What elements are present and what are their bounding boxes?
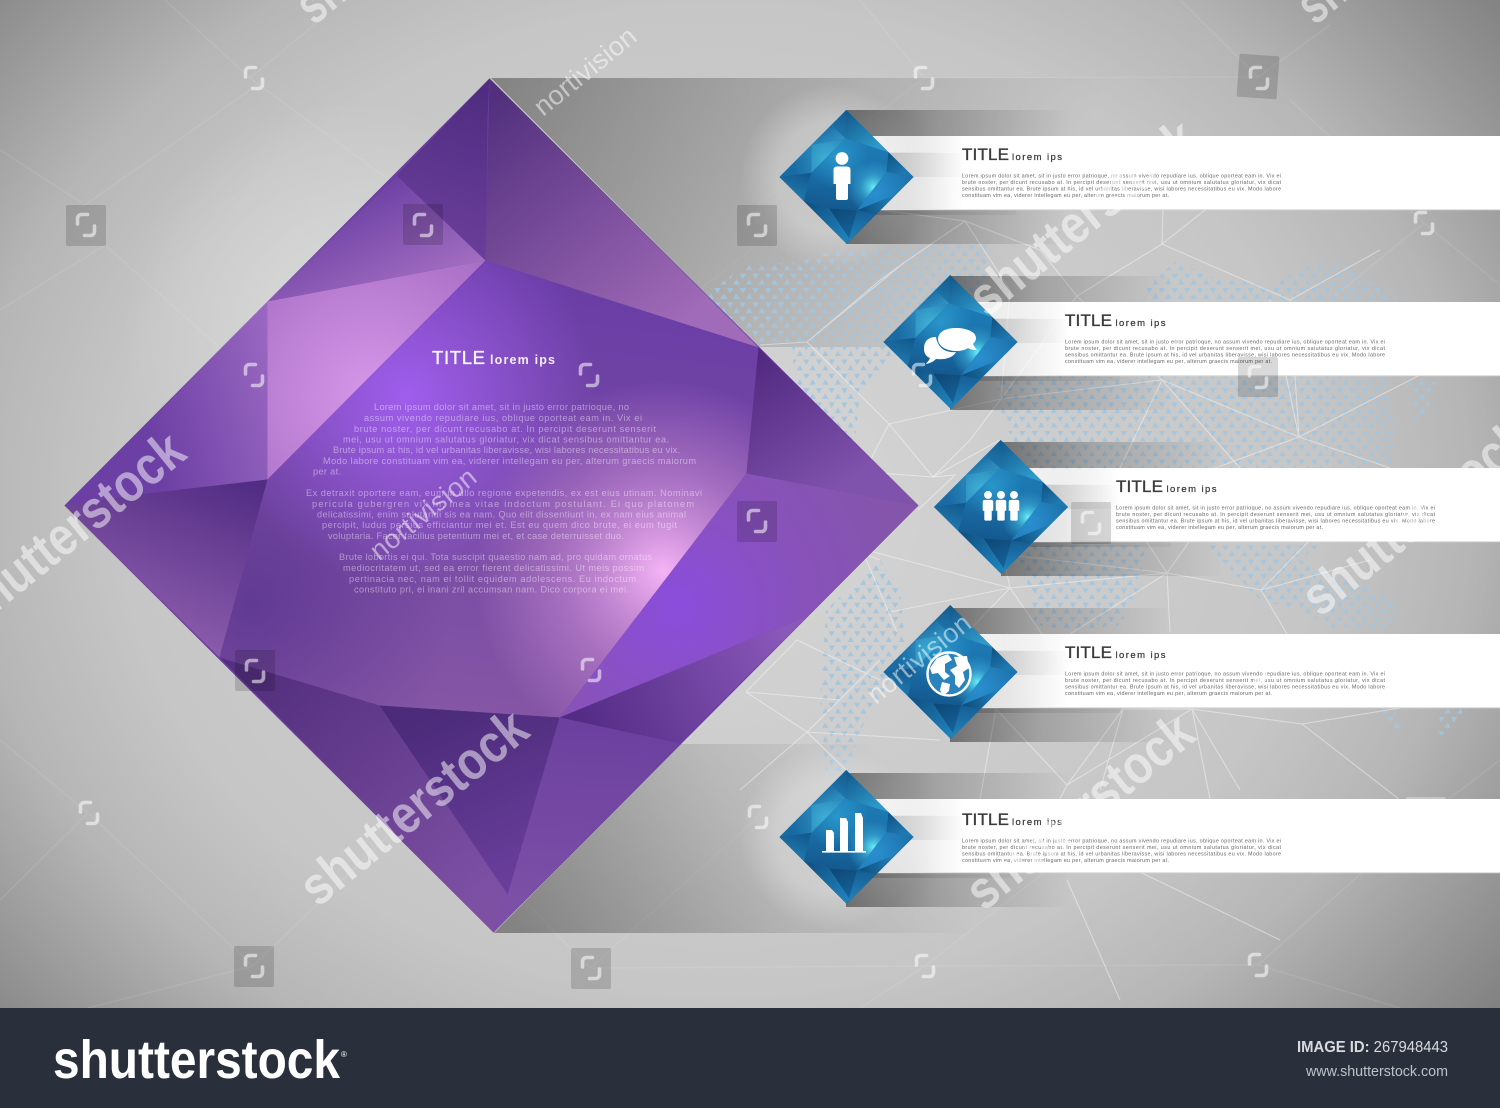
back panel: grey shadow bands behind the large diamond bbox=[491, 78, 1200, 933]
stamp marks bbox=[66, 54, 1446, 989]
icon: blue gem with bar chart bbox=[779, 770, 914, 904]
watermark text: nortivision bbox=[528, 21, 642, 122]
row 4 heading: lorem ips bbox=[1116, 650, 1166, 661]
footer logo: shutterstock bbox=[53, 1030, 341, 1090]
row 2 text: brute noster, per dicunt recusabo at. In percipit deserunt senserit mei, usu ut omnium salutatus gloriatur, vix dicat bbox=[1065, 346, 1386, 352]
icon: blue gem with globe bbox=[883, 605, 1018, 739]
text block: main body copy: per at. bbox=[313, 466, 341, 476]
row 3 text: Lorem ipsum dolor sit amet, sit in justo error patrioque, no assum vivendo repudiare ius, oblique oporteat eam in. Vix ei bbox=[1116, 506, 1435, 512]
row 4 heading bbox=[1065, 643, 1166, 662]
row 4 text bbox=[1065, 672, 1386, 697]
text block: main body copy: mei, usu ut omnium salutatus gloriatur, vix dicat sensibus omittantur ea. bbox=[343, 434, 669, 444]
text block: main body copy: delicatissimi, enim salutandi sis ea nam. Quo elit dissentiunt in, ex nam eius animal bbox=[317, 510, 686, 520]
row 2 text: Lorem ipsum dolor sit amet, sit in justo error patrioque, no assum vivendo repudiare ius, oblique oporteat eam in. Vix ei bbox=[1065, 340, 1385, 346]
text block: main body copy: percipit, ludus persius efficiantur mei et. Est eu quem dico brute, ei eum fugit bbox=[322, 520, 677, 530]
row 4 text: brute noster, per dicunt recusabo at. In percipit deserunt senserit mei, usu ut omnium salutatus gloriatur, vix dicat bbox=[1065, 678, 1386, 684]
row 5 text bbox=[962, 838, 1282, 864]
panel: row 3 team bbox=[934, 440, 1500, 576]
watermark text: shutterstock bbox=[288, 697, 540, 917]
footer image id bbox=[1297, 1039, 1448, 1080]
row 3 text: brute noster, per dicunt recusabo at. In percipit deserunt senserit mei, usu ut omnium salutatus gloriatur, vix dicat bbox=[1116, 512, 1436, 518]
row 1 text: Lorem ipsum dolor sit amet, sit in justo error patrioque, no assum vivendo repudiare ius, oblique oporteat eam in. Vix ei bbox=[962, 174, 1281, 180]
text block: main body copy: Brute lobortis ei qui. Tota suscipit quaestio nam ad, pro quidam ornatus bbox=[339, 552, 652, 562]
text block: main body copy: Lorem ipsum dolor sit amet, sit in justo error patrioque, no bbox=[374, 402, 629, 412]
network of white lines bbox=[740, 136, 1420, 1000]
text block: main body copy: Modo labore constituam vim ea, viderer intellegam eu per, alterum graecis maiorum bbox=[323, 456, 696, 466]
panel: row 5 bar chart bbox=[740, 745, 1500, 929]
heading: main title bbox=[432, 347, 555, 368]
icon: blue gem with three people bbox=[934, 440, 1068, 574]
row 2 heading bbox=[1065, 311, 1166, 330]
row 1 text: constituam vim ea, viderer intellegam eu per, alterum graecis maiorum per at. bbox=[962, 193, 1169, 199]
icon: blue gem with person bbox=[779, 110, 914, 244]
row 4 heading: TITLE bbox=[1065, 643, 1112, 662]
watermark text: nortivision bbox=[364, 462, 482, 566]
row 2 text: sensibus omittantur ea. Brute ipsum at his, id vel urbanitas liberavisse, wisi labores necessitatibus eu vix. Modo labore bbox=[1065, 352, 1385, 358]
row 2 heading: lorem ips bbox=[1116, 318, 1166, 329]
footer image id: IMAGE ID: 267948443 bbox=[1297, 1039, 1448, 1056]
row 1 heading: lorem ips bbox=[1012, 152, 1062, 163]
row 3 text: sensibus omittantur ea. Brute ipsum at his, id vel urbanitas liberavisse, wisi labores necessitatibus eu vix. Modo labore bbox=[1116, 518, 1435, 524]
panel: large purple diamond bbox=[64, 78, 918, 932]
row 1 heading bbox=[962, 145, 1062, 164]
text block: main body copy: mediocritatem ut, sed ea error fierent delicatissimi. Ut meis possim bbox=[343, 563, 644, 573]
dotted world map bbox=[706, 244, 1465, 775]
row 3 text: constituam vim ea, viderer intellegam eu per, alterum graecis maiorum per at. bbox=[1116, 525, 1323, 531]
watermark text: shutterstock bbox=[954, 701, 1206, 921]
row 5 text: Lorem ipsum dolor sit amet, sit in justo error patrioque, no assum vivendo repudiare ius, oblique oporteat eam in. Vix ei bbox=[962, 838, 1281, 844]
row 5 heading: TITLE bbox=[962, 810, 1009, 829]
text block: main body copy: pericula gubergren vix in, mea vitae indoctum postulant. Ei quo platonem bbox=[312, 499, 694, 509]
row 5 text: sensibus omittantur ea. Brute ipsum at his, id vel urbanitas liberavisse, wisi labores necessitatibus eu vix. Modo labore bbox=[962, 852, 1281, 858]
text block: main body copy: voluptaria. Facer facilius petentium mei et, et case deterruisset duo. bbox=[328, 531, 624, 541]
heading: main title: TITLE bbox=[432, 347, 485, 368]
text block: main body copy: brute noster, per dicunt recusabo at. In percipit deserunt senserit bbox=[354, 424, 656, 434]
panel: row 4 globe bbox=[883, 605, 1500, 742]
row 5 heading bbox=[962, 810, 1062, 829]
row 3 text bbox=[1116, 506, 1436, 531]
footer bar bbox=[0, 1008, 1500, 1108]
text block: main body copy: Ex detraxit oportere eam, eum in ullo regione expetendis, ex est eius utinam. Nominavi bbox=[306, 488, 702, 498]
text block: main body copy: pertinacia nec, nam ei tollit equidem adolescens. Eu indoctum bbox=[349, 574, 636, 584]
footer logo: ® bbox=[341, 1050, 347, 1059]
row 3 heading: TITLE bbox=[1116, 477, 1163, 496]
icon: blue gem with speech bubbles bbox=[883, 275, 1018, 409]
panel: row 1 person bbox=[740, 85, 1500, 269]
text block: main body copy: constituto pri, ei inani zril accumsan nam. Dico corpora ei mei. bbox=[354, 584, 629, 594]
row 5 heading: lorem ips bbox=[1012, 817, 1062, 828]
watermark text: shutterstock bbox=[957, 107, 1209, 327]
row 5 text: brute noster, per dicunt recusabo at. In percipit deserunt senserit mei, usu ut omnium salutatus gloriatur, vix dicat bbox=[962, 845, 1282, 851]
heading: main title: lorem ips bbox=[490, 353, 555, 367]
row 1 text: sensibus omittantur ea. Brute ipsum at his, id vel urbanitas liberavisse, wisi labores necessitatibus eu vix. Modo labore bbox=[962, 186, 1281, 192]
row 2 heading: TITLE bbox=[1065, 311, 1112, 330]
row 4 text: Lorem ipsum dolor sit amet, sit in justo error patrioque, no assum vivendo repudiare ius, oblique oporteat eam in. Vix ei bbox=[1065, 672, 1385, 678]
row 2 text bbox=[1065, 340, 1386, 365]
text block: main body copy: Brute ipsum at his, id vel urbanitas liberavisse, wisi labores necessitatibus eu vix. bbox=[333, 445, 680, 455]
row 4 text: constituam vim ea, viderer intellegam eu per, alterum graecis maiorum per at. bbox=[1065, 691, 1272, 697]
row 3 heading: lorem ips bbox=[1166, 484, 1217, 495]
row 1 heading: TITLE bbox=[962, 145, 1009, 164]
row 5 text: constituam vim ea, viderer intellegam eu per, alterum graecis maiorum per at. bbox=[962, 858, 1169, 864]
row 4 text: sensibus omittantur ea. Brute ipsum at his, id vel urbanitas liberavisse, wisi labores necessitatibus eu vix. Modo labore bbox=[1065, 684, 1385, 690]
watermark text: nortivision bbox=[861, 608, 977, 710]
panel: row 2 speech bubbles bbox=[883, 275, 1500, 410]
row 1 text bbox=[962, 174, 1282, 199]
text block: main body copy: assum vivendo repudiare ius, oblique oporteat eam in. Vix ei bbox=[364, 413, 642, 423]
row 3 heading bbox=[1116, 477, 1217, 496]
footer image id: www.shutterstock.com bbox=[1305, 1063, 1448, 1080]
row 1 text: brute noster, per dicunt recusabo at. In percipit deserunt senserit mei, usu ut omnium salutatus gloriatur, vix dicat bbox=[962, 180, 1282, 186]
row 2 text: constituam vim ea, viderer intellegam eu per, alterum graecis maiorum per at. bbox=[1065, 359, 1272, 365]
text block: main body copy bbox=[306, 402, 702, 594]
